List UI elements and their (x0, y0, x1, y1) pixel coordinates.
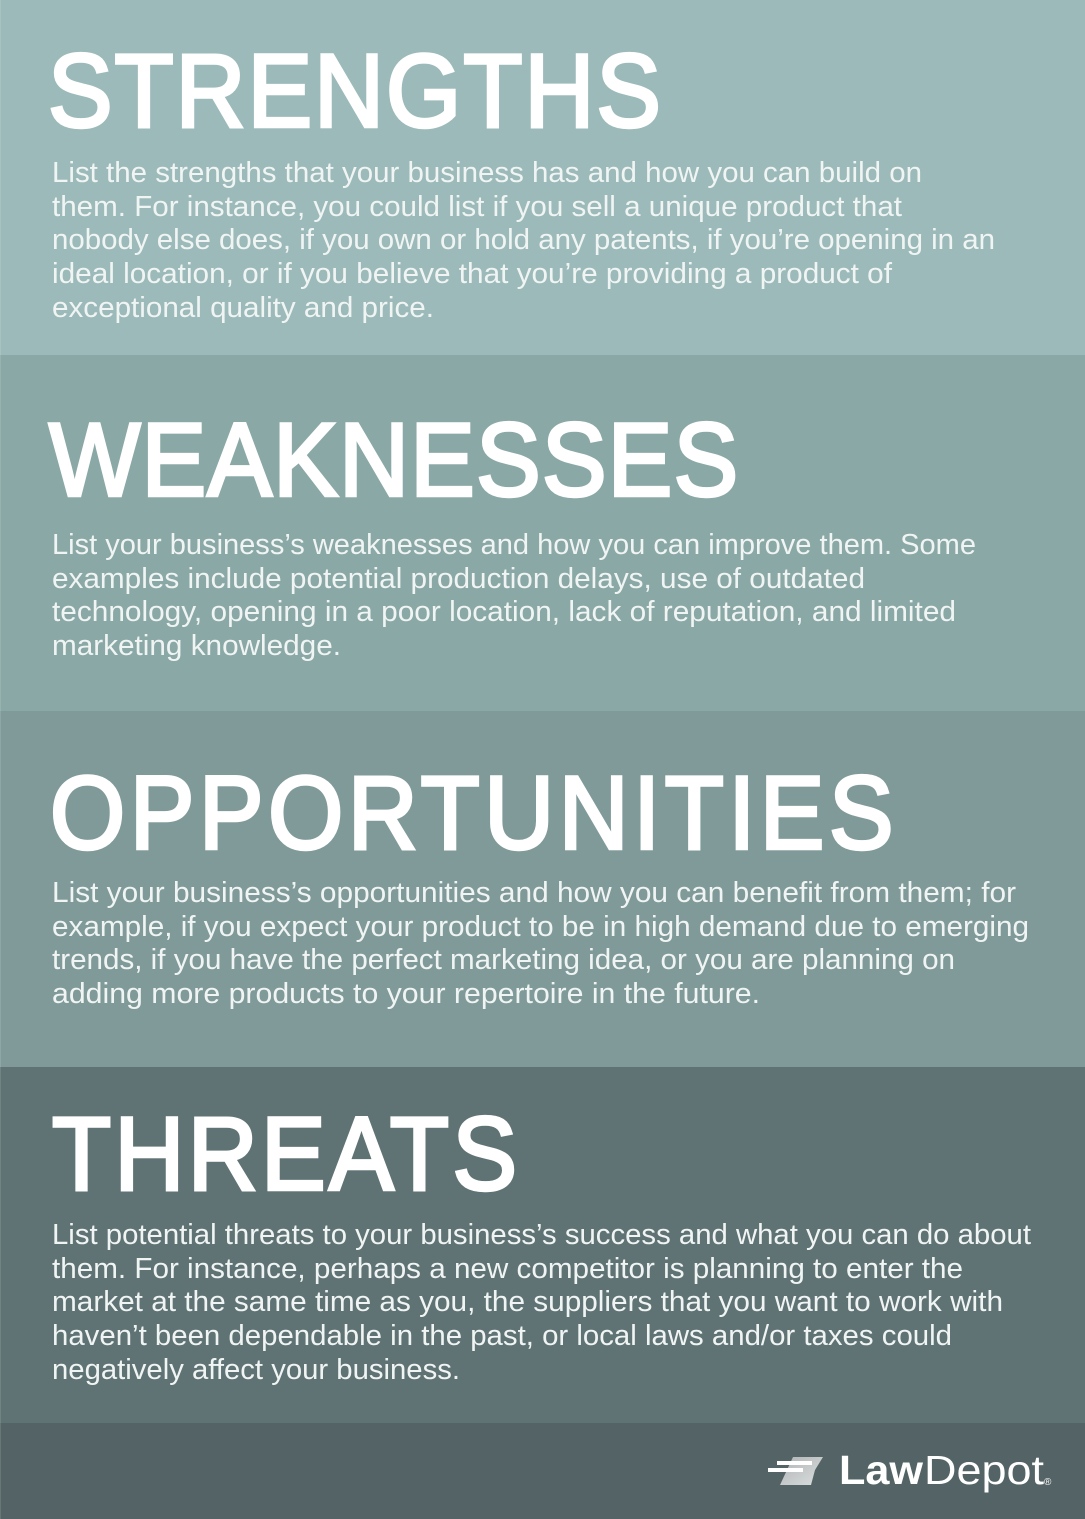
panel: weaknesses (0, 355, 1085, 712)
left edge highlight (0, 0, 1, 1519)
icon: LawDepot logo mark (768, 1457, 823, 1485)
text block: strengths description: nobody else does, if you own or hold any patents, if you’re opening in an (52, 224, 995, 256)
panel: threats (0, 1067, 1085, 1424)
logo wordmark: Law (839, 1447, 923, 1493)
text block: opportunities description: example, if you expect your product to be in high demand due to emerging (52, 911, 1029, 943)
text block: opportunities description: trends, if you have the perfect marketing idea, or you are planning on (52, 944, 955, 976)
text block: strengths description: ideal location, or if you believe that you’re providing a product of (52, 258, 892, 290)
text block: strengths description: exceptional quality and price. (52, 292, 434, 324)
logo wordmark (839, 1447, 1052, 1493)
text block: opportunities description: adding more products to your repertoire in the future. (52, 978, 760, 1010)
logo wordmark: Depot (924, 1447, 1045, 1493)
heading: strengths: STRENGTHS (48, 33, 661, 149)
logo wordmark: ® (1044, 1477, 1052, 1488)
text block: threats description: them. For instance, perhaps a new competitor is planning to enter the (52, 1253, 963, 1285)
text block: weaknesses description: List your business’s weaknesses and how you can improve them. Some (52, 529, 976, 561)
text block: threats description: haven’t been dependable in the past, or local laws and/or taxes could (52, 1320, 952, 1352)
text block: threats description (52, 1219, 1031, 1386)
text block: strengths description (52, 157, 995, 324)
heading: threats: THREATS (52, 1096, 517, 1212)
panel: footer (0, 1423, 1085, 1519)
text block: threats description: List potential threats to your business’s success and what you can do about (52, 1219, 1031, 1251)
text block: threats description: market at the same time as you, the suppliers that you want to work with (52, 1286, 1003, 1318)
text block: weaknesses description (52, 529, 976, 662)
heading: opportunities: OPPORTUNITIES (50, 755, 894, 871)
text block: weaknesses description: technology, opening in a poor location, lack of reputation, and limited (52, 596, 956, 628)
text block: threats description: negatively affect your business. (52, 1354, 460, 1386)
text block: opportunities description (52, 877, 1029, 1010)
text block: strengths description: them. For instance, you could list if you sell a unique product that (52, 191, 902, 223)
text block: weaknesses description: marketing knowledge. (52, 630, 341, 662)
panel: strengths (0, 0, 1085, 356)
text block: strengths description: List the strengths that your business has and how you can build on (52, 157, 922, 189)
panel: opportunities (0, 711, 1085, 1068)
heading: weaknesses: WEAKNESSES (49, 402, 738, 518)
text block: weaknesses description: examples include potential production delays, use of outdated (52, 563, 865, 595)
text block: opportunities description: List your business’s opportunities and how you can benefit from them; for (52, 877, 1017, 909)
